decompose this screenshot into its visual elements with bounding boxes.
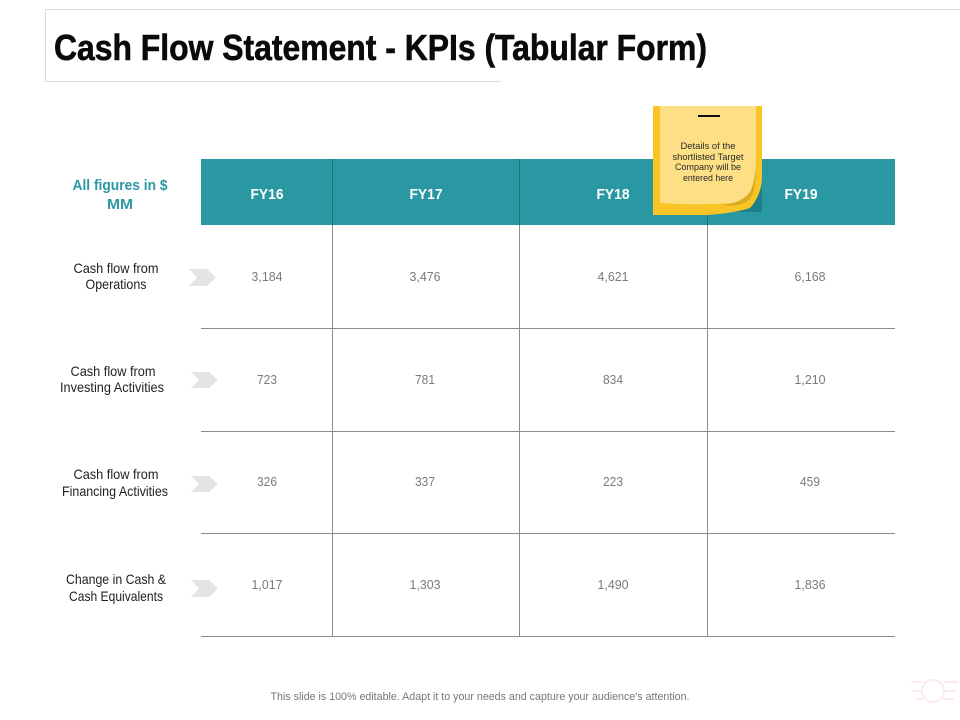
values: [252, 577, 826, 592]
sticky note callout: [653, 106, 762, 215]
values: 1,303: [410, 577, 440, 592]
units label: MM: [107, 196, 133, 213]
note fold: [722, 170, 756, 206]
watermark logo: [911, 680, 958, 702]
values: [252, 269, 826, 284]
values: 6,168: [794, 269, 826, 284]
row 3: cash flow from financing activities: [62, 466, 820, 499]
note back: [653, 106, 762, 215]
row label: Cash flow from: [74, 466, 158, 482]
values: 459: [800, 474, 820, 489]
note text: entered here: [683, 173, 733, 184]
row label: Financing Activities: [62, 483, 168, 499]
row label: Cash Equivalents: [69, 588, 163, 604]
table grid lines: [201, 225, 895, 637]
note text: Company will be: [675, 162, 741, 173]
header: FY16: FY16: [250, 186, 284, 203]
values: 1,490: [598, 577, 628, 592]
values: 223: [603, 474, 623, 489]
values: 1,836: [794, 577, 826, 592]
note text: [672, 141, 744, 184]
header: FY19: FY19: [784, 186, 818, 203]
values: 781: [415, 372, 435, 387]
values: 1,210: [794, 372, 826, 387]
row label: [74, 260, 158, 292]
values: 3,476: [410, 269, 440, 284]
chevron icon: [191, 580, 218, 597]
row 4: change in cash and cash equivalents: [66, 571, 826, 604]
title frame: [46, 10, 960, 82]
values: 337: [415, 474, 435, 489]
footer note: This slide is 100% editable. Adapt it to your needs and capture your audience's attention.: [270, 691, 690, 703]
chevron icon: [191, 372, 218, 388]
note face: [660, 106, 756, 204]
note text: Details of the: [680, 141, 736, 152]
row label: Investing Activities: [60, 379, 164, 395]
values: 326: [257, 474, 277, 489]
values: 1,017: [252, 577, 282, 592]
units label: [72, 177, 168, 213]
row label: Cash flow from: [70, 363, 156, 379]
values: [257, 372, 826, 387]
units label: All figures in $: [72, 177, 168, 194]
table header band: [201, 159, 895, 225]
row label: [60, 363, 164, 395]
row label: [66, 571, 167, 604]
row label: Cash flow from: [74, 260, 158, 276]
values: [257, 474, 820, 489]
row label: [62, 466, 168, 499]
title: Cash Flow Statement - KPIs (Tabular Form): [54, 27, 707, 68]
header: FY17: FY17: [410, 186, 442, 203]
row label: Operations: [86, 276, 146, 292]
values: 4,621: [598, 269, 628, 284]
note text: shortlisted Target: [672, 152, 744, 163]
header: FY18: FY18: [596, 186, 630, 203]
row label: Change in Cash &: [66, 571, 167, 587]
row 2: cash flow from investing activities: [60, 363, 826, 395]
chevron icon: [189, 269, 216, 286]
values: 723: [257, 372, 277, 387]
note shadow: [715, 185, 762, 212]
chevron icon: [191, 476, 218, 492]
values: 834: [603, 372, 623, 387]
row 1: cash flow from operations: [74, 260, 826, 292]
values: 3,184: [252, 269, 282, 284]
note dash: [698, 115, 720, 117]
